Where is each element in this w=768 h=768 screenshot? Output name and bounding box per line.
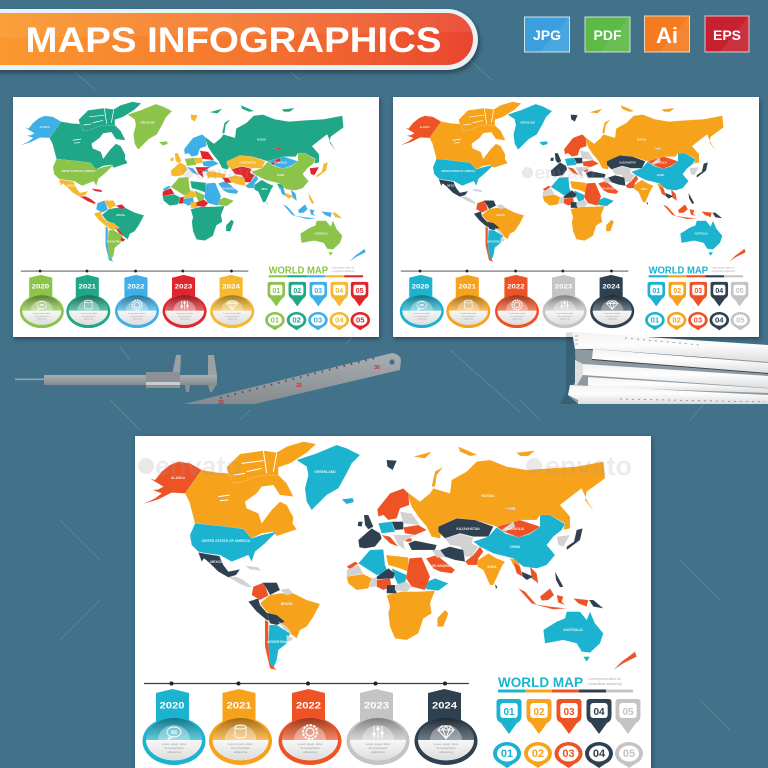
country labels: ALASKA — [420, 126, 430, 129]
legend: world map pins: 02 — [293, 288, 301, 295]
legend: world map pins — [493, 674, 643, 768]
legend: world map pins: 02 — [672, 315, 681, 324]
country labels: MEXICO — [67, 185, 77, 188]
country labels: BRAZIL — [281, 602, 293, 606]
timeline 2020-2024: 2021 — [79, 284, 97, 291]
legend: world map pins: Lorem ipsum dolor sit — [712, 267, 735, 270]
watermark: envato — [534, 163, 595, 184]
panel: green world map — [13, 97, 379, 337]
country labels — [420, 122, 708, 244]
legend: world map pins: 05 — [623, 748, 635, 760]
country labels: MEXICO — [210, 560, 224, 564]
legend: world map pins: 02 — [533, 707, 545, 718]
timeline 2020-2024: 2022 — [127, 284, 145, 291]
legend: world map pins: 01 — [501, 748, 513, 760]
steel ruler — [184, 353, 401, 406]
legend: world map pins: 01 — [503, 707, 515, 718]
country labels: UNITED STATES OF AMERICA — [202, 539, 251, 543]
panel: main world map — [135, 436, 651, 768]
legend: world map pins: Lorem ipsum dolor sit — [332, 267, 355, 270]
country labels: BRAZIL — [117, 214, 126, 217]
country labels: UNITED STATES OF AMERICA — [61, 170, 96, 173]
country labels: CHINA — [657, 174, 665, 177]
format badge: EPS — [705, 16, 749, 52]
legend: world map pins: 04 — [335, 315, 344, 324]
legend: world map pins: 04 — [715, 315, 724, 324]
country labels: KAZAKHSTAN — [456, 527, 480, 531]
timeline 2020-2024: 2024 — [432, 700, 457, 710]
map: world — [143, 442, 637, 670]
format badge: PDF — [585, 17, 630, 52]
legend: world map pins: 03 — [562, 748, 575, 760]
country labels: MONGOLIA — [654, 162, 667, 165]
country labels: RUSSIA — [482, 494, 495, 498]
format badge: EPS: EPS — [713, 27, 741, 43]
legend: world map pins: consectetur adipiscing — [332, 270, 356, 273]
legend: world map pins: consectetur adipiscing — [588, 682, 622, 686]
country labels: SAUDI ARABIA — [218, 188, 235, 191]
legend: world map pins: 05 — [356, 315, 365, 324]
timeline 2020-2024 — [142, 682, 478, 765]
legend: world map pins: 02 — [673, 288, 681, 295]
legend: world map pins: 03 — [314, 288, 322, 295]
watermark right: envato — [545, 451, 632, 481]
timeline 2020-2024 — [20, 270, 254, 328]
country labels: CHINA — [277, 174, 285, 177]
country labels — [171, 470, 583, 644]
legend: world map pins: 02 — [292, 315, 301, 324]
format badge: Ai: Ai — [656, 23, 678, 48]
country labels: BRAZIL — [497, 214, 506, 217]
country labels: AUSTRALIA — [694, 232, 708, 235]
legend: world map pins: Lorem ipsum dolor sit — [588, 677, 620, 681]
legend: world map pins: 05 — [622, 707, 634, 718]
legend: world map pins: consectetur adipiscing — [712, 270, 736, 273]
country labels: MEXICO — [447, 185, 457, 188]
timeline 2020-2024 — [400, 270, 634, 328]
steel ruler: 30 — [374, 365, 380, 371]
country labels: SAUDI ARABIA — [426, 564, 451, 568]
country labels: SAUDI ARABIA — [598, 188, 615, 191]
legend: world map pins: 01 — [272, 288, 280, 295]
legend: world map pins: WORLD MAP — [269, 265, 329, 276]
title banner: MAPS INFOGRAPHICS — [26, 21, 441, 60]
map: world, orange palette — [400, 102, 746, 262]
format badge: PDF: PDF — [594, 27, 622, 43]
timeline 2020-2024: 2023 — [555, 284, 573, 291]
timeline 2020-2024: 2021 — [459, 284, 477, 291]
legend: world map pins: 01 — [651, 315, 660, 324]
format badge: JPG — [524, 17, 570, 52]
timeline 2020-2024: 2023 — [364, 700, 389, 710]
watermark: envato — [195, 163, 256, 184]
legend: world map pins: 05 — [356, 288, 364, 295]
country labels: ARGENTINA — [487, 241, 501, 244]
legend: world map pins: 04 — [715, 288, 723, 295]
legend: world map pins — [265, 266, 370, 330]
country labels: ARGENTINA — [267, 640, 288, 644]
format badge: JPG: JPG — [533, 27, 561, 43]
country labels: KAZAKHSTAN — [619, 162, 636, 165]
country labels: MONGOLIA — [274, 162, 287, 165]
country labels: KAZAKHSTAN — [239, 162, 256, 165]
steel ruler: 20 — [218, 400, 224, 406]
legend: world map pins: 04 — [593, 707, 605, 718]
country labels: MONGOLIA — [506, 527, 525, 531]
legend: world map pins: 04 — [335, 288, 343, 295]
map: world, green palette — [20, 102, 366, 262]
country labels: RUSSIA — [257, 138, 266, 141]
country labels: ALASKA — [171, 476, 186, 480]
legend: world map pins: 05 — [736, 315, 745, 324]
legend: world map pins: 03 — [314, 315, 322, 324]
format badge: Ai — [644, 16, 690, 52]
country labels: GREENLAND — [140, 122, 155, 125]
rolled paper blueprints — [560, 332, 768, 404]
timeline 2020-2024: 2020 — [412, 284, 430, 291]
timeline 2020-2024: 2022 — [296, 700, 321, 710]
watermark left: envato — [155, 451, 242, 481]
timeline 2020-2024: 2021 — [226, 700, 252, 710]
legend: world map pins: WORLD MAP — [649, 265, 709, 276]
country labels: INDIA — [261, 188, 268, 191]
legend: world map pins: 05 — [736, 288, 744, 295]
timeline 2020-2024: 2022 — [507, 284, 525, 291]
legend: world map pins: 03 — [694, 315, 702, 324]
country labels: ARGENTINA — [107, 241, 121, 244]
country labels: GREENLAND — [314, 470, 336, 474]
country labels: CHINA — [510, 545, 521, 549]
country labels: RUSSIA — [637, 138, 646, 141]
steel ruler: 25 — [296, 383, 302, 389]
legend: world map pins: WORLD MAP — [498, 674, 583, 690]
country labels: GREENLAND — [520, 122, 535, 125]
country labels: INDIA — [641, 188, 648, 191]
legend: world map pins — [645, 266, 750, 330]
country labels: INDIA — [487, 565, 497, 569]
legend: world map pins: 01 — [271, 315, 280, 324]
country labels: AUSTRALIA — [563, 628, 583, 632]
country labels — [40, 122, 328, 244]
country labels: UNITED STATES OF AMERICA — [441, 170, 476, 173]
legend: world map pins: 01 — [652, 288, 660, 295]
timeline 2020-2024: 2024 — [602, 284, 621, 291]
timeline 2020-2024: 2024 — [222, 284, 241, 291]
legend: world map pins: 03 — [563, 707, 575, 718]
legend: world map pins: 02 — [532, 748, 544, 760]
country labels: AUSTRALIA — [314, 232, 328, 235]
timeline 2020-2024: 2020 — [160, 700, 185, 710]
legend: world map pins: 03 — [694, 288, 702, 295]
legend: world map pins: 04 — [593, 748, 606, 760]
title banner — [0, 9, 478, 70]
timeline 2020-2024: 2020 — [32, 284, 50, 291]
panel: orange and blue world map — [393, 97, 759, 337]
caliper — [15, 355, 217, 392]
timeline 2020-2024: 2023 — [175, 284, 193, 291]
country labels: ALASKA — [40, 126, 50, 129]
